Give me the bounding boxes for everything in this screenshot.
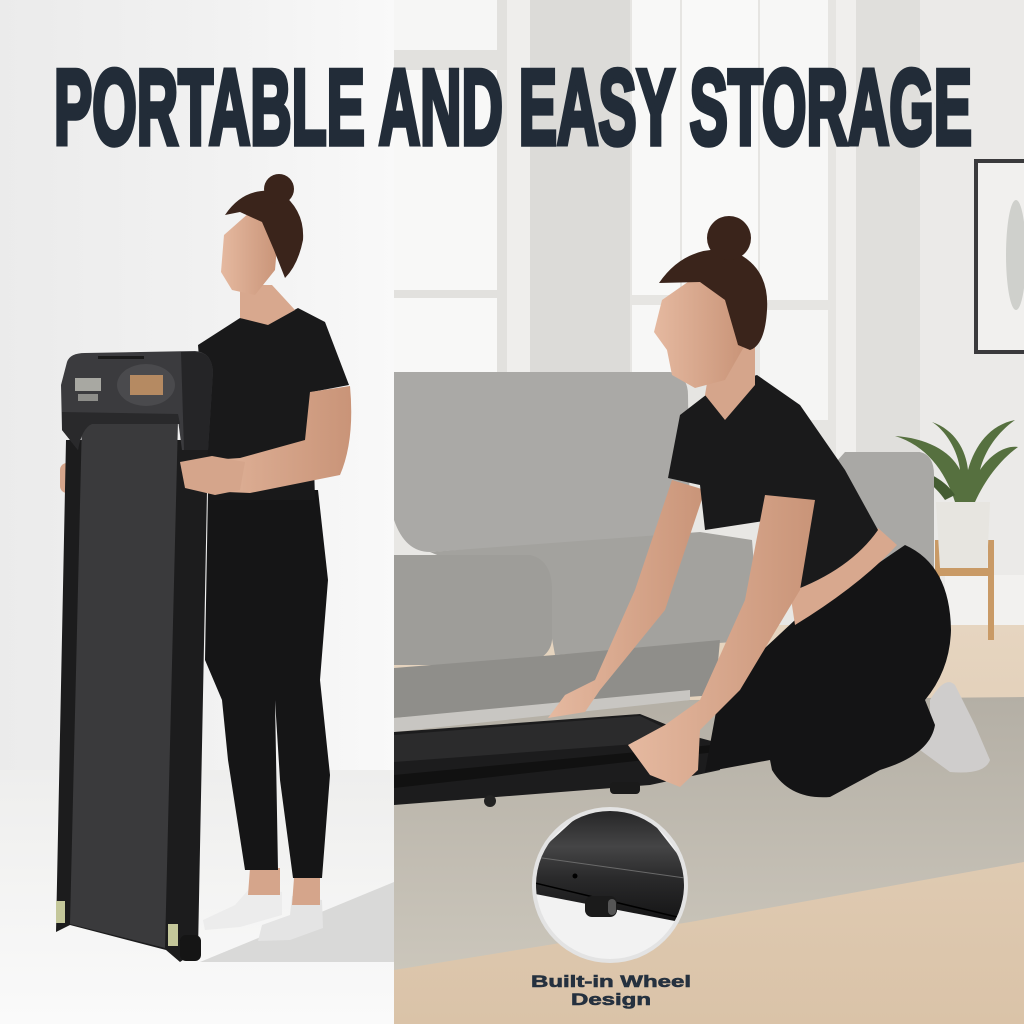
plant pot: [938, 540, 988, 568]
face: [221, 212, 278, 295]
hair: [225, 191, 303, 278]
wall column: [530, 0, 630, 375]
ankles: [248, 868, 320, 905]
near arm: [628, 495, 815, 787]
hand: [180, 456, 245, 495]
inset caption: [531, 973, 691, 1009]
hair: [659, 249, 767, 350]
torso: [668, 375, 878, 592]
end caps: [56, 901, 178, 946]
plant: [895, 420, 1018, 502]
console head: [61, 351, 213, 450]
inset circle: wheel detail: [530, 806, 690, 963]
inset caption: Design: [571, 991, 651, 1009]
floor: [394, 625, 1024, 1024]
wheels: [180, 935, 201, 961]
rug: [394, 697, 1024, 970]
inset caption: Built-in Wheel: [531, 973, 691, 991]
console display: [75, 356, 175, 406]
belt: [70, 420, 178, 948]
sofa: [394, 372, 934, 732]
leggings: [205, 490, 330, 878]
socks: [203, 888, 282, 930]
arm: [180, 386, 351, 493]
flat treadmill: [394, 714, 720, 807]
neck: [240, 285, 295, 325]
torso shirt: [198, 308, 349, 500]
standing woman: [60, 174, 351, 941]
kneeling woman: [548, 216, 990, 797]
legs: [705, 545, 951, 797]
upright treadmill: [56, 351, 245, 962]
far arm: [548, 480, 705, 718]
framed picture: [974, 159, 1024, 354]
window left: [394, 0, 497, 372]
plant stool: [935, 540, 994, 640]
backing frame: [56, 440, 208, 962]
panel: right living room scene: [394, 0, 1024, 1024]
neck: [705, 347, 755, 420]
bare midriff: [790, 528, 897, 625]
far hand: [60, 463, 78, 493]
window right: [630, 0, 856, 460]
panel: left studio scene: [0, 0, 394, 1024]
face: [654, 282, 744, 388]
wall right: [945, 575, 1024, 625]
sock: [920, 682, 990, 772]
